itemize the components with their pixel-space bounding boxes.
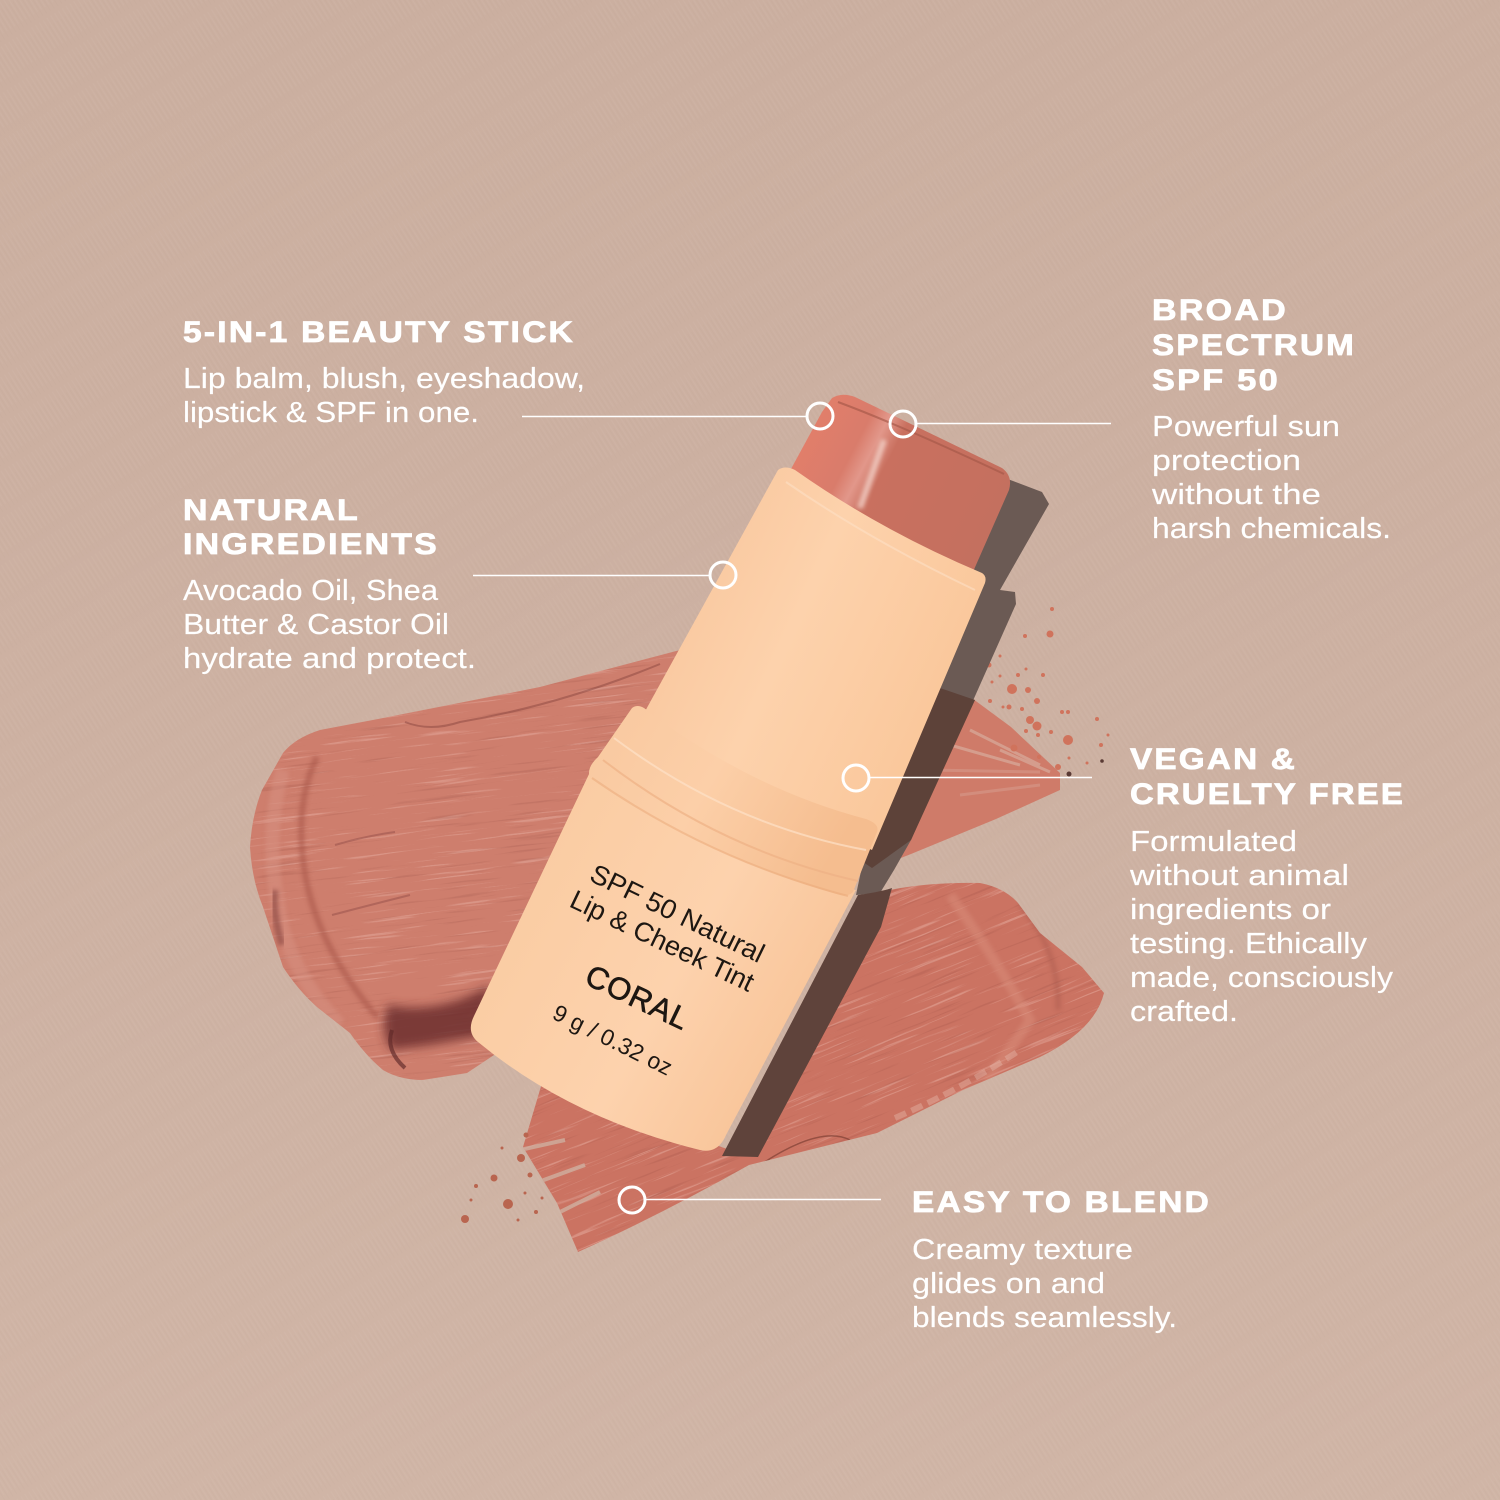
text block: 5-in-1 beauty stick: 5-IN-1 BEAUTY STICK: [183, 316, 575, 349]
product: stick tube: [471, 395, 1010, 1151]
text block: 5-in-1 beauty stick: [183, 316, 585, 429]
text block: vegan and cruelty free: testing. Ethically: [1130, 928, 1368, 960]
text block: vegan and cruelty free: VEGAN &: [1130, 743, 1297, 776]
text block: broad spectrum SPF 50: protection: [1152, 445, 1301, 477]
text block: broad spectrum SPF 50: without the: [1151, 479, 1321, 511]
text block: easy to blend: [912, 1186, 1211, 1334]
text block: vegan and cruelty free: [1129, 743, 1405, 1028]
swatch: left cream smear: [250, 650, 678, 1080]
callout: vegan connector: [843, 765, 1092, 791]
text block: broad spectrum SPF 50: BROAD: [1152, 294, 1288, 327]
text block: broad spectrum SPF 50: harsh chemicals.: [1152, 513, 1391, 545]
text block: natural ingredients: Avocado Oil, Shea: [183, 575, 439, 607]
text block: vegan and cruelty free: CRUELTY FREE: [1130, 778, 1405, 811]
swatch: lower cream smear with splatter: [461, 882, 1104, 1252]
lower base: [471, 772, 856, 1151]
upper sleeve: [632, 468, 986, 850]
product cast shadow: [722, 478, 1049, 1157]
callout: 5-in-1 connector: [522, 403, 833, 429]
text block: easy to blend: blends seamlessly.: [912, 1302, 1177, 1334]
paint splatter: lower left: [461, 1132, 544, 1223]
text block: vegan and cruelty free: without animal: [1129, 860, 1349, 892]
text block: 5-in-1 beauty stick: lipstick & SPF in one.: [183, 397, 479, 429]
text block: vegan and cruelty free: crafted.: [1130, 996, 1238, 1028]
tube label text: [549, 858, 769, 1080]
text block: easy to blend: EASY TO BLEND: [912, 1186, 1211, 1219]
coral balm bullet: [785, 395, 1010, 590]
text block: 5-in-1 beauty stick: Lip balm, blush, eyeshadow,: [183, 363, 585, 395]
callout: easy to blend connector: [619, 1187, 881, 1213]
text block: natural ingredients: Butter & Castor Oil: [183, 609, 449, 641]
text block: vegan and cruelty free: made, consciously: [1130, 962, 1394, 994]
text block: natural ingredients: INGREDIENTS: [183, 528, 439, 561]
text block: natural ingredients: hydrate and protect.: [183, 643, 476, 675]
text block: vegan and cruelty free: ingredients or: [1130, 894, 1331, 926]
callout: broad spectrum connector: [890, 411, 1111, 437]
text block: broad spectrum SPF 50: SPECTRUM: [1152, 329, 1356, 362]
tube label text: Lip & Cheek Tint: [565, 884, 759, 998]
text block: natural ingredients: NATURAL: [183, 494, 360, 527]
tube label text: SPF 50 Natural: [585, 858, 769, 969]
callout: natural ingredients connector: [473, 562, 736, 588]
text block: vegan and cruelty free: Formulated: [1130, 826, 1297, 858]
swatch: right cream smear with splatter: [901, 607, 1110, 858]
middle ring collar: [589, 706, 878, 896]
text block: broad spectrum SPF 50: [1151, 294, 1391, 545]
text block: easy to blend: Creamy texture: [912, 1234, 1133, 1266]
tube label text: 9 g / 0.32 oz: [549, 999, 677, 1080]
text block: natural ingredients: [183, 494, 476, 675]
paint splatter: upper right: [986, 607, 1110, 776]
tube label text: CORAL: [580, 958, 694, 1037]
text block: broad spectrum SPF 50: Powerful sun: [1152, 411, 1340, 443]
text block: broad spectrum SPF 50: SPF 50: [1152, 364, 1280, 397]
text block: easy to blend: glides on and: [912, 1268, 1105, 1300]
